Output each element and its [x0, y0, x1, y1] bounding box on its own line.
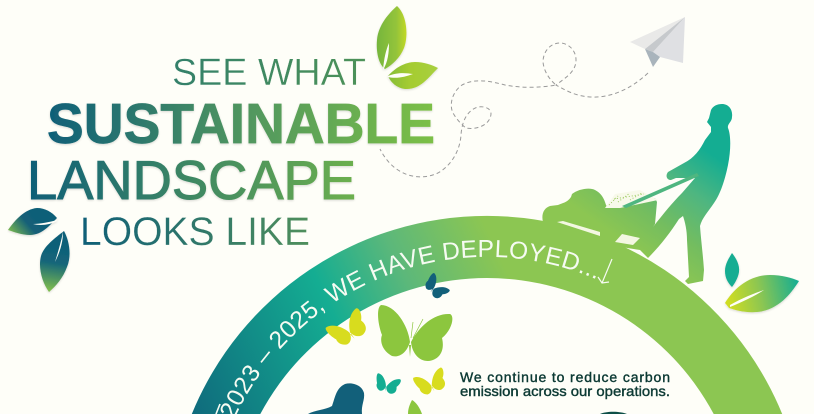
butterfly: small teal: [375, 373, 401, 395]
butterflies: [325, 272, 452, 414]
title line: landscape: LANDSCAPE: [27, 149, 356, 211]
title line: see what: SEE WHAT: [172, 52, 366, 94]
title line: looks like: LOOKS LIKE: [80, 210, 310, 254]
line one: We continue to reduce carbon: [460, 369, 670, 385]
grass specks: [609, 193, 652, 205]
text block: carbon statement: [460, 369, 670, 399]
arch banner: [192, 104, 782, 414]
icon: bottom-left leaves: [8, 208, 70, 292]
icon: paper plane: [630, 17, 685, 67]
dashed flight path: [380, 43, 648, 177]
butterfly: large green: [378, 305, 452, 361]
butterfly: bottom green: [408, 400, 422, 414]
title line: sustainable: SUSTAINABLE: [47, 92, 435, 156]
butterfly: yellow left: [325, 304, 373, 351]
line two: emission across our operations.: [460, 383, 670, 399]
icon: top leaves: [377, 6, 438, 89]
title: [27, 52, 435, 254]
icon: down arrow: [598, 259, 612, 283]
butterfly: dark teal: [421, 272, 452, 302]
mower handle: [622, 173, 699, 208]
silhouette: woman: [308, 383, 364, 414]
grass catcher: [605, 190, 658, 208]
cropped letter stroke: [216, 404, 220, 414]
icon: right leaves: [725, 253, 799, 312]
butterfly: yellow right: [412, 364, 451, 399]
man with lawn mower silhouette: [542, 104, 732, 284]
dark circle top: [600, 412, 627, 414]
mower highlights: [557, 221, 600, 236]
